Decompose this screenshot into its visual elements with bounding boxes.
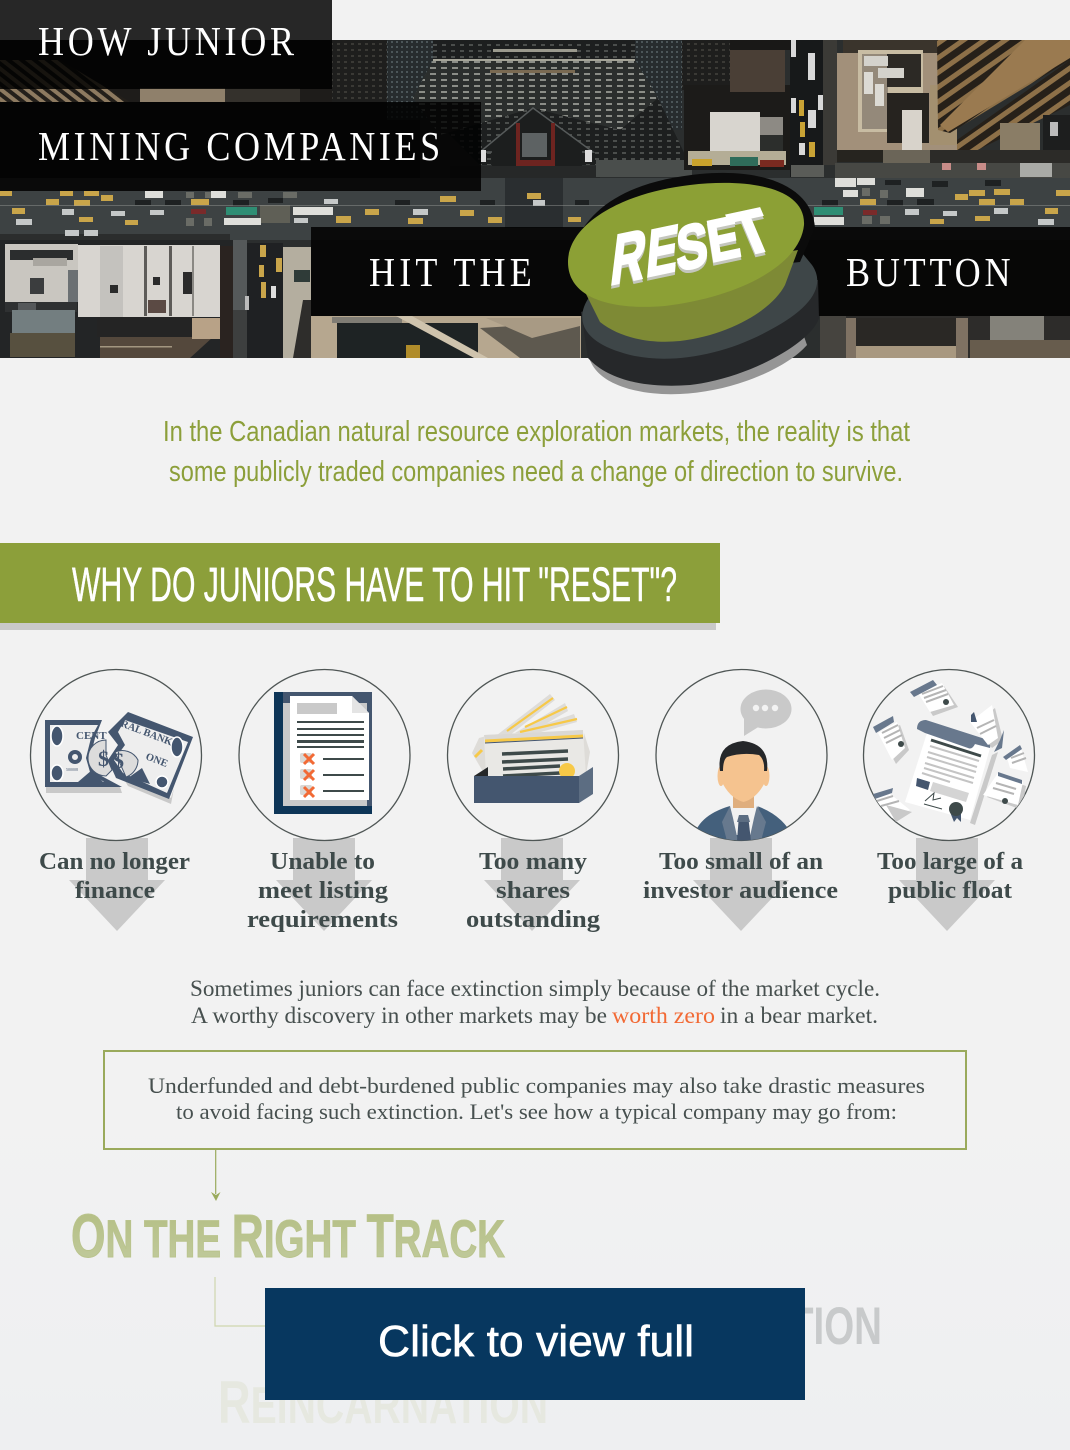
reason 4: too small of an investor audience (643, 670, 838, 931)
paragraph: market cycle: A worthy discovery in other markets may be (191, 1003, 607, 1028)
label: investor audience (643, 877, 838, 904)
reason 3: too many shares outstanding (448, 670, 618, 933)
faded heading: reincarnation: REINCARNATION (218, 1369, 548, 1436)
hero photo: aerial city street (0, 40, 1070, 358)
icon: green RESET button: R (607, 213, 651, 300)
label: public float (888, 877, 1013, 904)
icon: torn banknotes (30, 670, 202, 840)
icon: torn banknotes: $ (113, 748, 124, 773)
label (877, 848, 1023, 904)
icon: speech bubble (740, 690, 792, 736)
section heading banner (0, 543, 720, 630)
label: Too large of a (877, 848, 1023, 875)
label (643, 848, 838, 904)
heading: on the right track: ON THE RIGHT TRACK (71, 1202, 505, 1270)
label: meet listing (258, 877, 389, 904)
intro text: some publicly traded companies need a change of direction to survive. (169, 456, 903, 488)
title panel: MINING COMPANIES (0, 102, 481, 191)
arrow: callout to first stage (211, 1150, 220, 1201)
label (466, 848, 601, 933)
reason 1: can no longer finance (30, 670, 202, 931)
icon: torn banknotes: RAL BANK (119, 719, 175, 749)
title panel: MINING COMPANIES: MINING COMPANIES (38, 125, 440, 170)
icon: green RESET button: T (721, 199, 783, 271)
reason 5: too large of a public float (864, 670, 1034, 931)
callout box: Underfunded and debt-burdened public companies may also take drastic measures (148, 1073, 925, 1098)
paragraph: market cycle: Sometimes juniors can face extinction simply because of the market cycle. (190, 976, 880, 1001)
label: Unable to (270, 848, 375, 875)
label: requirements (247, 906, 398, 933)
arrow 3 (484, 838, 580, 931)
arrow 1 (69, 838, 165, 931)
icon: green RESET button: E (644, 215, 681, 295)
paragraph: market cycle (190, 976, 880, 1028)
callout box: to avoid facing such extinction. Let's see how a typical company may go from: (176, 1099, 897, 1124)
paragraph: market cycle: worth zero (612, 1003, 715, 1028)
label (247, 848, 398, 933)
icon: green RESET button: E (703, 208, 744, 278)
arrow 4 (693, 838, 789, 931)
icon: stack of share certificates in a box (448, 670, 618, 840)
title panel: HIT THE / BUTTON: HIT THE (369, 251, 532, 296)
connector line (215, 1277, 270, 1326)
title panel: HOW JUNIOR (0, 0, 332, 89)
label: finance (75, 877, 155, 904)
label: Can no longer (39, 848, 190, 875)
icon: green RESET button: S (675, 212, 709, 287)
section heading banner: WHY DO JUNIORS HAVE TO HIT "RESET"? (72, 559, 677, 612)
view full button: Click to view full (378, 1317, 694, 1366)
title panel: HIT THE / BUTTON: BUTTON (846, 251, 1011, 296)
icon: torn banknotes: 500008 (66, 767, 78, 772)
icon: green RESET button: R (607, 216, 651, 303)
icon: green RESET button: T (721, 196, 783, 268)
intro text: In the Canadian natural resource exploration markets, the reality is that (163, 416, 910, 448)
icon: green RESET button: S (675, 209, 709, 284)
title panel: HIT THE / BUTTON (311, 227, 1070, 316)
arrow 2 (276, 838, 372, 931)
faded heading fragment behind the button: TION (790, 1297, 882, 1356)
view full button (265, 1288, 805, 1400)
intro text (163, 416, 910, 488)
small certificates (870, 680, 1028, 822)
icon: green RESET button: E (703, 205, 744, 275)
label: Too small of an (659, 848, 823, 875)
label: shares (496, 877, 570, 904)
icon: businessman with speech bubble (656, 670, 827, 841)
label: outstanding (466, 906, 601, 933)
paragraph: market cycle: in a bear market. (720, 1003, 878, 1028)
icon: torn banknotes: CENT (76, 730, 107, 742)
icon: scattered share certificates (864, 670, 1034, 840)
icon: green RESET button (568, 173, 819, 394)
reason 2: unable to meet listing requirements (239, 670, 410, 933)
icon: document with red crosses (239, 670, 410, 840)
icon: torn banknotes: $ (98, 746, 109, 771)
callout box (104, 1051, 966, 1149)
icon: green RESET button: E (644, 212, 681, 292)
label (39, 848, 190, 904)
icon: torn banknotes: ONE (144, 752, 169, 770)
arrow 5 (899, 838, 995, 931)
label: Too many (479, 848, 588, 875)
main certificate (905, 720, 998, 825)
title panel: HOW JUNIOR: HOW JUNIOR (38, 20, 294, 65)
